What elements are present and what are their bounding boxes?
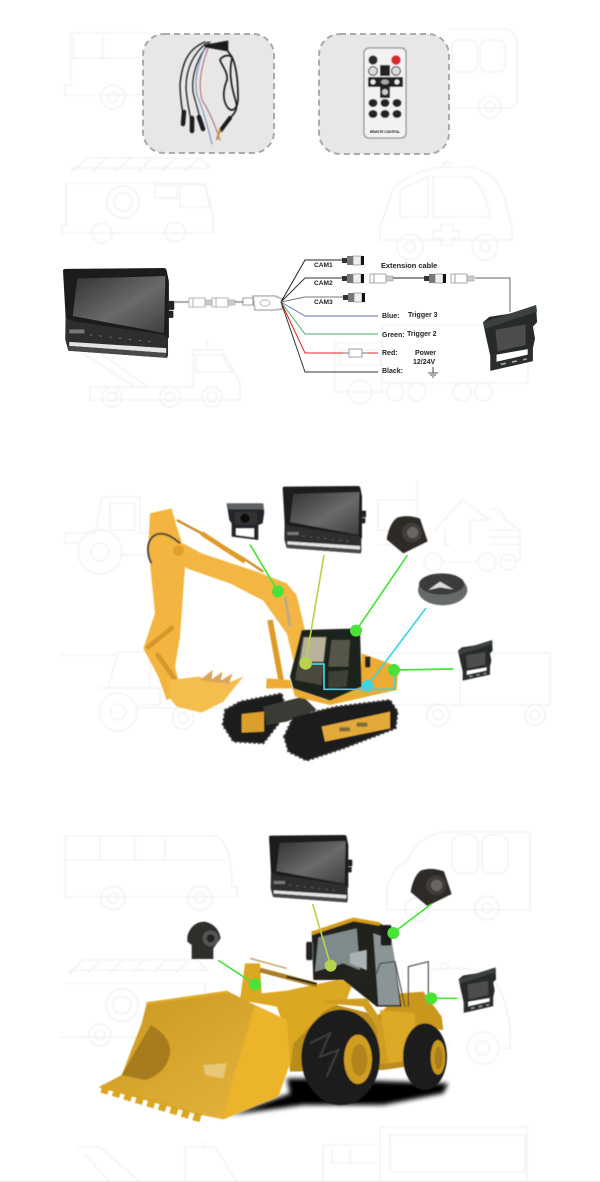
bucket	[98, 992, 290, 1119]
rear camera right	[458, 640, 493, 681]
loader	[98, 919, 448, 1119]
icon: cable harness	[180, 42, 238, 144]
cab	[312, 919, 402, 1007]
side camera	[387, 516, 428, 553]
background: faint vehicle outlines	[60, 29, 550, 1182]
bottom page edge	[0, 1181, 600, 1182]
background: camper lower	[387, 832, 530, 922]
labels: wiring: Black:	[382, 368, 403, 375]
background: fire truck	[62, 158, 213, 243]
background: fire truck lower	[60, 960, 207, 1046]
panel: excavator installation	[143, 486, 493, 761]
underbody fill	[287, 1003, 410, 1072]
icon: ground symbol	[428, 367, 438, 377]
background: box truck	[335, 325, 528, 404]
wheels	[403, 1023, 447, 1090]
labels: wiring: Green:	[382, 332, 405, 339]
labels: wiring: CAM3	[314, 299, 333, 306]
front track	[284, 700, 398, 761]
frame	[263, 697, 317, 725]
rear body	[377, 992, 443, 1063]
rear track	[223, 693, 287, 743]
side camera	[411, 869, 452, 906]
panel: wheel loader installation	[98, 835, 496, 1119]
rear camera	[227, 503, 264, 540]
monitor	[269, 835, 352, 902]
panel: remote control accessory	[319, 34, 449, 154]
arm and tower	[240, 963, 353, 1070]
stick	[143, 508, 185, 700]
wires fan	[281, 260, 510, 372]
background: forklift	[378, 480, 520, 571]
cable reel	[418, 573, 467, 605]
background: bottom vehicles	[78, 1127, 527, 1182]
labels: wiring: Blue:	[382, 313, 400, 320]
icon: camera plugs	[342, 256, 474, 357]
excavator	[143, 508, 398, 761]
icon: rear camera	[483, 305, 537, 371]
labels: wiring: Trigger 2	[407, 331, 437, 338]
side camera left	[187, 922, 221, 959]
boom	[173, 543, 305, 667]
labels: wiring: Extension cable	[381, 261, 437, 270]
rear camera	[459, 967, 496, 1013]
connectors from monitor to splitter	[173, 296, 282, 310]
label: remote control: REMOTE CONTROL	[370, 130, 400, 134]
shadow	[230, 1078, 448, 1115]
labels: wiring: CAM1	[314, 262, 333, 269]
background: tractor	[65, 497, 165, 574]
background: ambulance lower	[430, 962, 510, 1064]
pointer dots	[272, 585, 400, 692]
cab	[290, 628, 362, 701]
bucket	[168, 677, 243, 713]
icon: monitor	[63, 268, 174, 358]
background: ambulance	[380, 162, 512, 260]
background: camper top	[449, 29, 517, 118]
labels: wiring: Trigger 3	[408, 312, 438, 319]
labels: wiring	[314, 261, 438, 375]
fender and body	[323, 998, 388, 1063]
labels: wiring: 12/24V	[413, 359, 436, 366]
labels: wiring: CAM2	[314, 280, 333, 287]
labels: wiring: Red:	[382, 350, 398, 357]
background: bus lower	[65, 836, 237, 910]
upper body	[266, 653, 398, 705]
pointer dots	[249, 927, 437, 1004]
labels: wiring: Power	[415, 350, 436, 357]
background: truck lower right	[370, 653, 550, 726]
panel: wiring harness accessory	[143, 34, 274, 153]
pointer lines	[250, 545, 453, 689]
pointer lines	[218, 904, 457, 998]
monitor	[283, 486, 366, 553]
background: tow truck	[83, 340, 240, 407]
background: bus top	[65, 33, 150, 109]
panel: wiring diagram	[63, 256, 537, 377]
background: truck lower left	[60, 652, 230, 731]
